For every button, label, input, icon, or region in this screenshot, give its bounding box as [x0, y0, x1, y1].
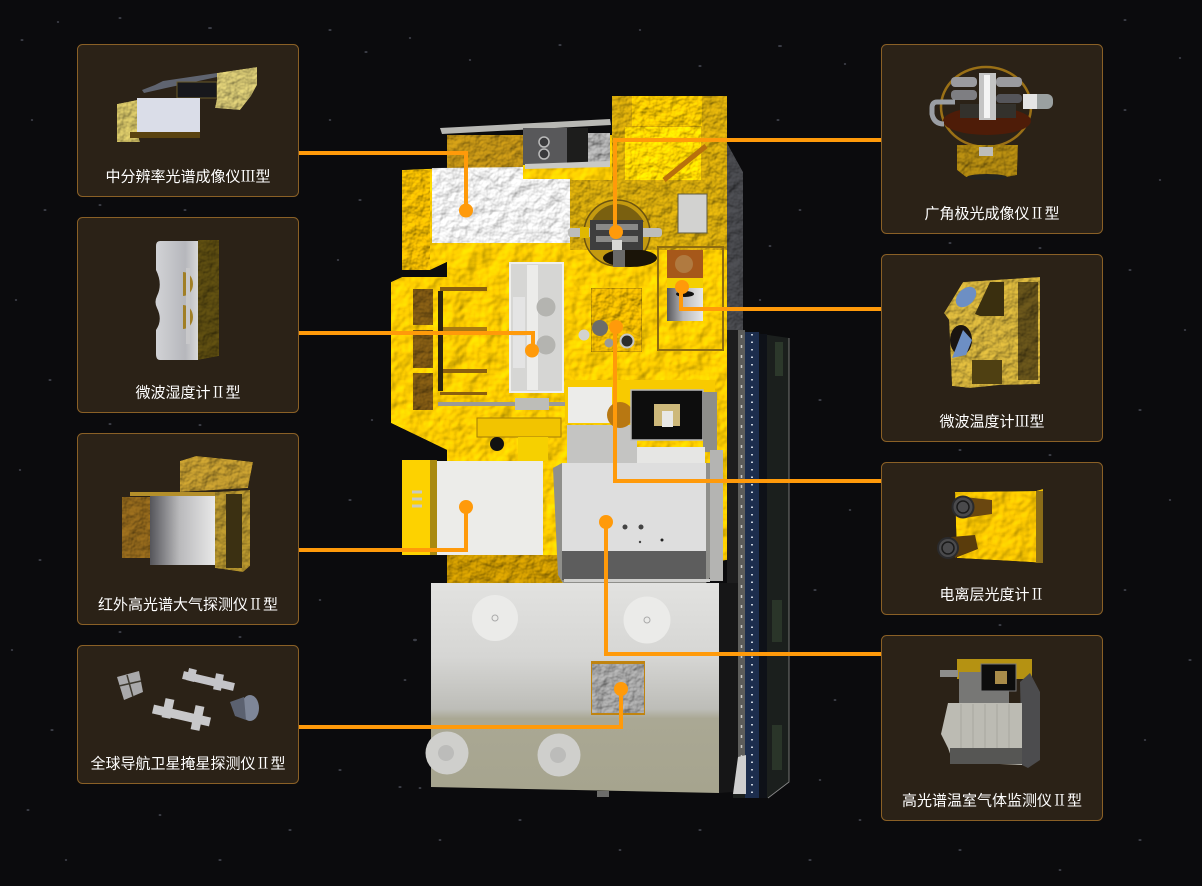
leader: infrared sounder [299, 500, 473, 550]
label: 电离层光度计Ⅱ [939, 584, 1045, 604]
main gold body [391, 96, 727, 583]
icon: ionospheric photometer instrument [938, 489, 1043, 563]
panel: 微波湿度计II型 [78, 218, 298, 412]
label: 高光谱温室气体监测仪Ⅱ型 [902, 790, 1082, 810]
label: 微波湿度计Ⅱ型 [135, 382, 241, 402]
icon: aurora imager instrument [932, 67, 1053, 180]
antenna disc [472, 595, 518, 641]
leader: humidity [299, 333, 539, 358]
leader: aurora imager [609, 140, 881, 239]
antenna disc [624, 596, 670, 644]
icon: greenhouse gas instrument [940, 659, 1040, 768]
panel: 红外高光谱大气探测仪II型 [78, 434, 298, 624]
label: 全球导航卫星掩星探测仪Ⅱ型 [90, 752, 286, 774]
top metal bracket [440, 119, 611, 169]
leader: GNOS [299, 682, 628, 727]
hyperspectral greenhouse gas monitor [553, 450, 723, 585]
white foil panel HIRAS [402, 460, 543, 555]
left gold radiator windows [413, 287, 566, 410]
leader: microwave temperature [675, 280, 881, 309]
callout leader lines [299, 140, 881, 727]
antenna disc [538, 734, 580, 776]
panel: 中分辨率光谱成像仪III型 [78, 44, 298, 196]
antenna disc [426, 732, 468, 774]
lower gold fittings [477, 418, 561, 461]
label: 中分辨率光谱成像仪Ⅲ型 [105, 166, 271, 186]
label: 广角极光成像仪Ⅱ型 [924, 202, 1060, 224]
solar array panel [733, 330, 789, 798]
panel: 微波温度计III型 [882, 254, 1102, 442]
leader: greenhouse gas [599, 515, 881, 654]
panel: 高光谱温室气体监测仪II型 [882, 636, 1102, 820]
panel: 全球导航卫星掩星探测仪II型 [78, 646, 298, 784]
satellite: central model [391, 96, 789, 798]
ionospheric photometer base [578, 288, 642, 352]
microwave humidity unit [510, 263, 563, 392]
label: 微波温度计Ⅲ型 [939, 410, 1045, 432]
white small box [678, 194, 707, 233]
icon: occultation instruments [117, 669, 259, 730]
aurora imager [568, 200, 662, 267]
leader: MERSI [299, 153, 473, 218]
icon: microwave humidity instrument [156, 240, 219, 360]
occultation sounder patch [591, 661, 645, 715]
label: 红外高光谱大气探测仪Ⅱ型 [98, 594, 278, 614]
icon: MERSI instrument [117, 67, 257, 142]
icon: microwave temperature instrument [944, 277, 1040, 388]
leader: ionospheric photometer [609, 320, 881, 481]
gold strap [664, 146, 706, 180]
icon: infrared sounder instrument [122, 456, 253, 572]
microwave temperature unit [658, 247, 723, 350]
dark side wall [719, 143, 746, 794]
lower mid instrument block [565, 380, 717, 465]
white foil panel MERSI [432, 167, 570, 243]
panel: 广角极光成像仪II型 [882, 44, 1102, 234]
panel: 电离层光度计II [882, 462, 1102, 614]
lower module [426, 583, 719, 797]
